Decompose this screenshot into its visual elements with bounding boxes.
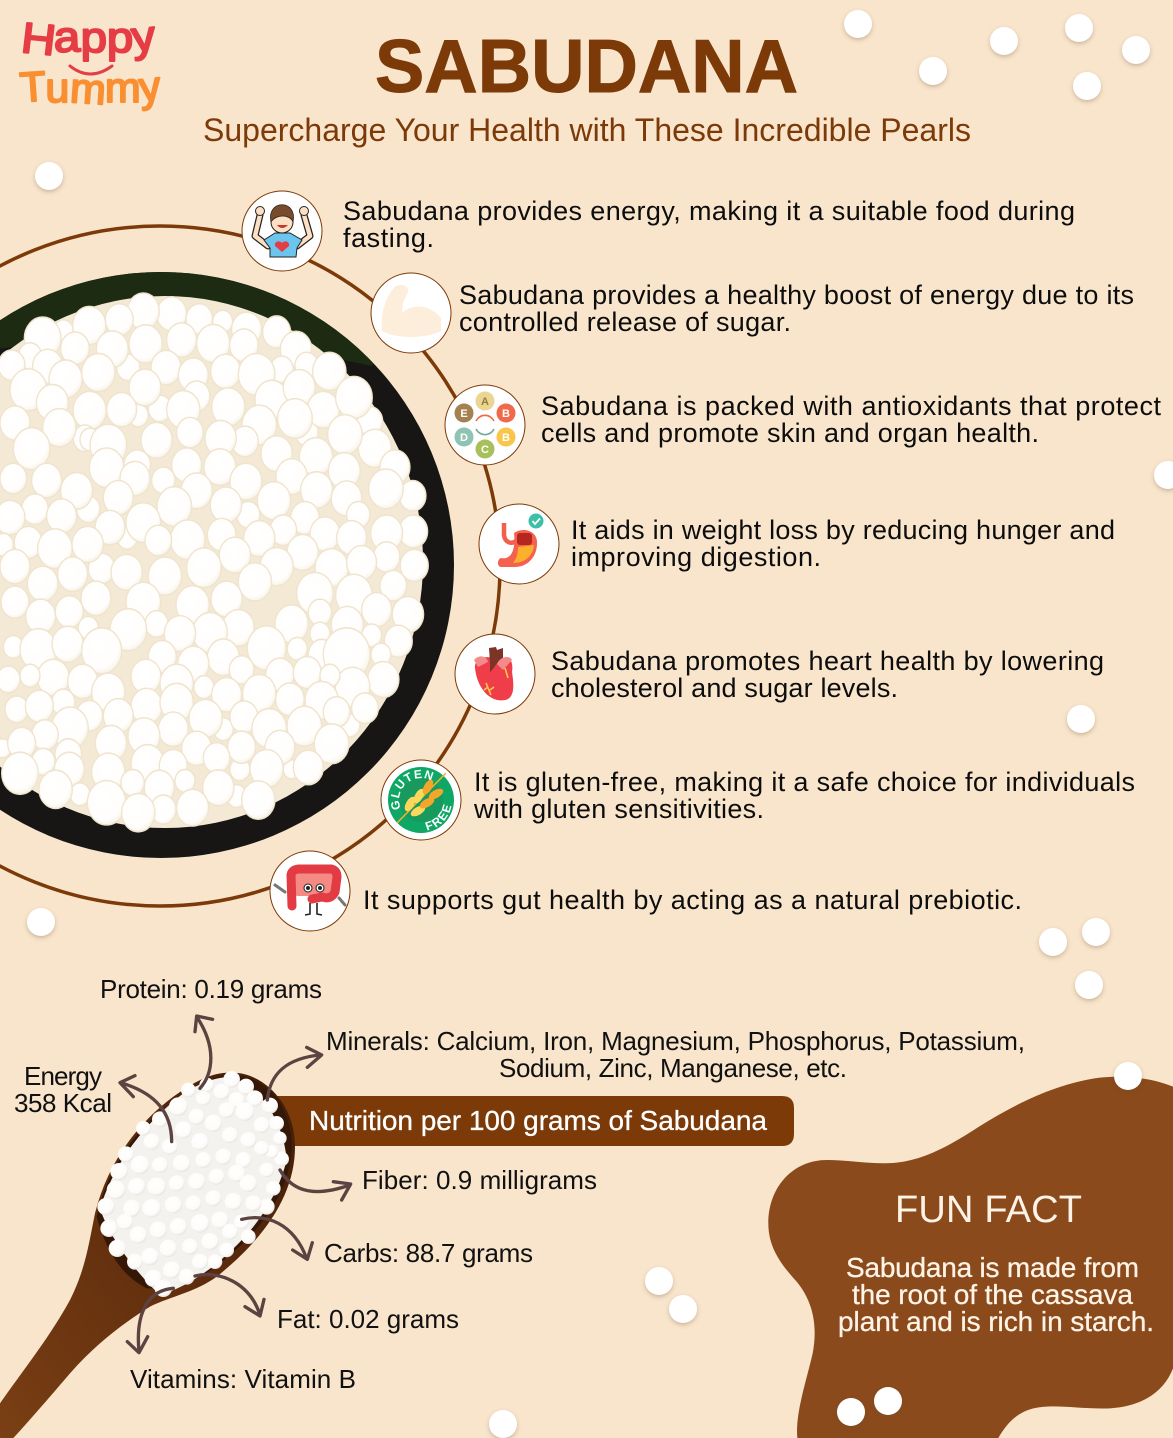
logo: Happy Tummy (18, 12, 163, 113)
icon: stomach (479, 504, 559, 584)
nutrition heading bar: Nutrition per 100 grams of Sabudana (309, 1105, 767, 1136)
benefit 2: boost (371, 273, 1134, 353)
logo: Happy Tummy: Tummy (18, 62, 163, 113)
label: carbs: Carbs: 88.7 grams (324, 1238, 533, 1268)
fun fact text: the root of the cassava (852, 1279, 1133, 1310)
benefit text 4: improving digestion. (571, 542, 821, 572)
benefit 6: gluten-free (380, 760, 1135, 840)
benefit text 6 (473, 767, 1135, 824)
icon: heart (455, 634, 535, 714)
spoon of sabudana (0, 1071, 295, 1438)
fun fact text: plant and is rich in starch. (838, 1306, 1154, 1337)
icon: smiling intestine (270, 851, 350, 931)
benefit text 1: fasting. (343, 223, 434, 253)
label: energy: Energy (24, 1061, 102, 1091)
fun fact blob (768, 1077, 1173, 1438)
arrow: energy (120, 1076, 172, 1142)
icon: vitamins (445, 385, 525, 465)
benefit text 1 (343, 196, 1075, 253)
fun fact pearls (837, 1062, 1142, 1426)
icon: gluten free badge (380, 760, 462, 840)
benefit text 3: cells and promote skin and organ health. (541, 418, 1039, 448)
logo: Happy Tummy: Happy (19, 12, 158, 66)
benefit 3: antioxidants (445, 385, 1161, 465)
icon: gluten free badge: FREE (425, 804, 452, 830)
label: fat: Fat: 0.02 grams (277, 1304, 459, 1334)
benefit text 7: It supports gut health by acting as a natural prebiotic. (363, 885, 1022, 915)
icon: vitamins: B (502, 408, 510, 420)
label: vitamins: Vitamins: Vitamin B (130, 1364, 356, 1394)
fun fact text: Sabudana is made from (846, 1252, 1139, 1283)
label: minerals: Minerals: Calcium, Iron, Magnesium, Phosphorus, Potassium, (326, 1026, 1025, 1056)
icon: vitamins: D (460, 432, 468, 444)
label: energy: 358 Kcal (14, 1088, 112, 1118)
benefit text 6: It is gluten-free, making it a safe choice for individuals (474, 767, 1135, 797)
label: minerals: Sodium, Zinc, Manganese, etc. (499, 1053, 847, 1083)
label: minerals (326, 1026, 1025, 1083)
arrow: vitamins (127, 1288, 173, 1353)
subtitle: Supercharge Your Health with These Incredible Pearls (203, 112, 971, 148)
icon: flexed arm (371, 273, 451, 353)
label: fiber: Fiber: 0.9 milligrams (362, 1165, 597, 1195)
arrow: fiber (280, 1170, 351, 1200)
icon: gluten free badge: GLUTEN (391, 770, 434, 810)
benefit text 4: It aids in weight loss by reducing hunger and (571, 515, 1115, 545)
nutrition heading bar (270, 1096, 794, 1146)
benefit text 2 (459, 280, 1134, 337)
label: energy (14, 1061, 112, 1118)
label: protein: Protein: 0.19 grams (100, 974, 322, 1004)
benefit text 3 (541, 391, 1161, 448)
benefit text 5: Sabudana promotes heart health by lowering (551, 646, 1104, 676)
title: SABUDANA (375, 24, 798, 108)
fun fact heading: FUN FACT (895, 1189, 1082, 1231)
benefit text 6: with gluten sensitivities. (473, 794, 764, 824)
fun fact text (838, 1252, 1154, 1337)
arrow: protein (195, 1016, 213, 1088)
benefit 1: energy (242, 191, 1075, 271)
benefit 4: digestion (479, 504, 1115, 584)
benefit 7: gut health (270, 851, 1022, 931)
bowl of sabudana (0, 260, 454, 858)
icon: vitamins: E (460, 408, 468, 420)
nutrition arrows (120, 1016, 351, 1353)
benefits ring (0, 226, 500, 906)
benefit text 1: Sabudana provides energy, making it a suitable food during (343, 196, 1075, 226)
panel: fun fact (768, 1062, 1173, 1438)
benefit text 4 (571, 515, 1115, 572)
benefit text 5 (551, 646, 1104, 703)
icon: vitamins: C (481, 444, 489, 456)
arrow: fat (195, 1275, 264, 1316)
arrow: carbs (242, 1218, 312, 1259)
icon: vitamins: A (481, 396, 489, 408)
benefit text 2: Sabudana provides a healthy boost of energy due to its (459, 280, 1134, 310)
benefit text 3: Sabudana is packed with antioxidants that protect (541, 391, 1161, 421)
benefit text 2: controlled release of sugar. (459, 307, 791, 337)
benefit text 5: cholesterol and sugar levels. (551, 673, 898, 703)
benefit 5: heart (455, 634, 1104, 714)
arrow: minerals (267, 1047, 322, 1100)
icon: vitamins: B (502, 432, 510, 444)
icon: happy man (242, 191, 322, 271)
